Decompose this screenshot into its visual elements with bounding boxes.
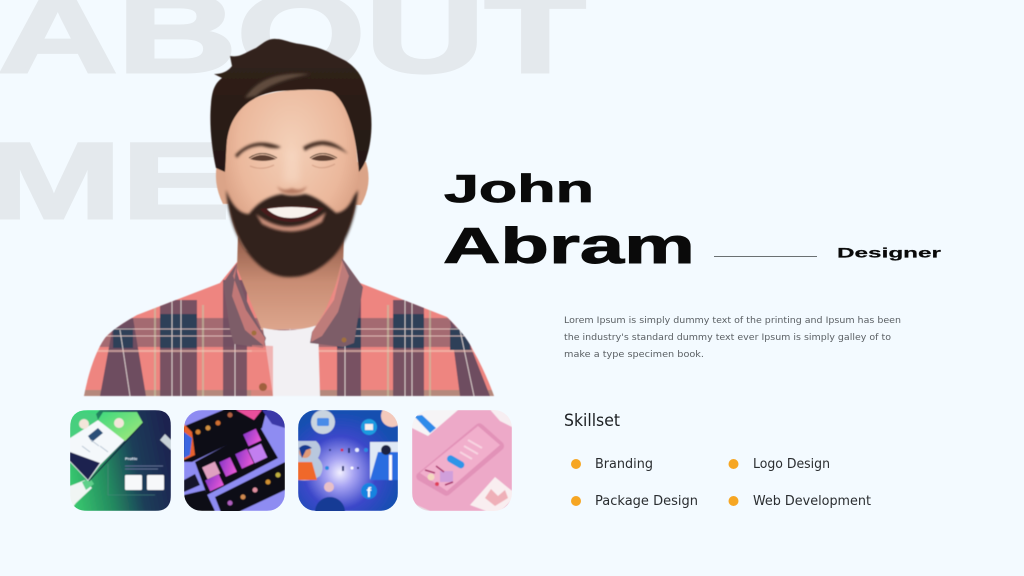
nose: [277, 186, 307, 194]
beard: [226, 190, 358, 277]
description paragraph: the industry's standard dummy text ever Ipsum is simply galley of to: [564, 333, 892, 343]
description paragraph: [564, 316, 901, 360]
portfolio thumbnail 3: social network illustration: f: [367, 484, 372, 500]
portfolio thumbnail 1: green profile app: Profile: [125, 456, 138, 461]
portfolio thumbnail 2: dark music app screens: [184, 410, 285, 511]
shirt collar: [223, 263, 266, 348]
skill: Package Design: Package Design: [595, 494, 698, 509]
role label: Designer: [837, 245, 941, 261]
face: [224, 90, 358, 275]
shirt placket and buttons: [251, 345, 273, 396]
portfolio thumbnail 1: green profile app: [70, 410, 171, 511]
mouth and teeth: [260, 206, 324, 222]
eyebrows: [235, 142, 281, 158]
portrait photo illustration: [80, 39, 500, 396]
skill: Logo Design: Logo Design: [753, 457, 830, 472]
eyes: [250, 155, 276, 161]
ears: [216, 160, 232, 204]
connector line: [714, 256, 817, 258]
skill: Branding: Branding: [595, 457, 653, 472]
name heading: [443, 168, 695, 274]
shirt: [80, 255, 500, 396]
name heading: John: [444, 168, 594, 211]
skills list: [571, 457, 871, 509]
portfolio thumbnail 3: social network illustration: [298, 410, 398, 511]
portfolio thumbnail 4: pink phone mockup: [412, 410, 512, 511]
lower lip: [256, 212, 326, 232]
description paragraph: Lorem Ipsum is simply dummy text of the printing and Ipsum has been: [564, 316, 901, 326]
description paragraph: make a type specimen book.: [564, 350, 704, 360]
skillset heading: Skillset: [564, 411, 620, 431]
name heading: Abram: [443, 219, 695, 274]
neck: [237, 235, 344, 330]
hair highlight: [245, 74, 310, 98]
skill: Web Development: Web Development: [753, 494, 871, 509]
hair: [210, 39, 371, 172]
white t-shirt: [263, 325, 320, 396]
background title: ABOUT ME: [0, 0, 586, 241]
